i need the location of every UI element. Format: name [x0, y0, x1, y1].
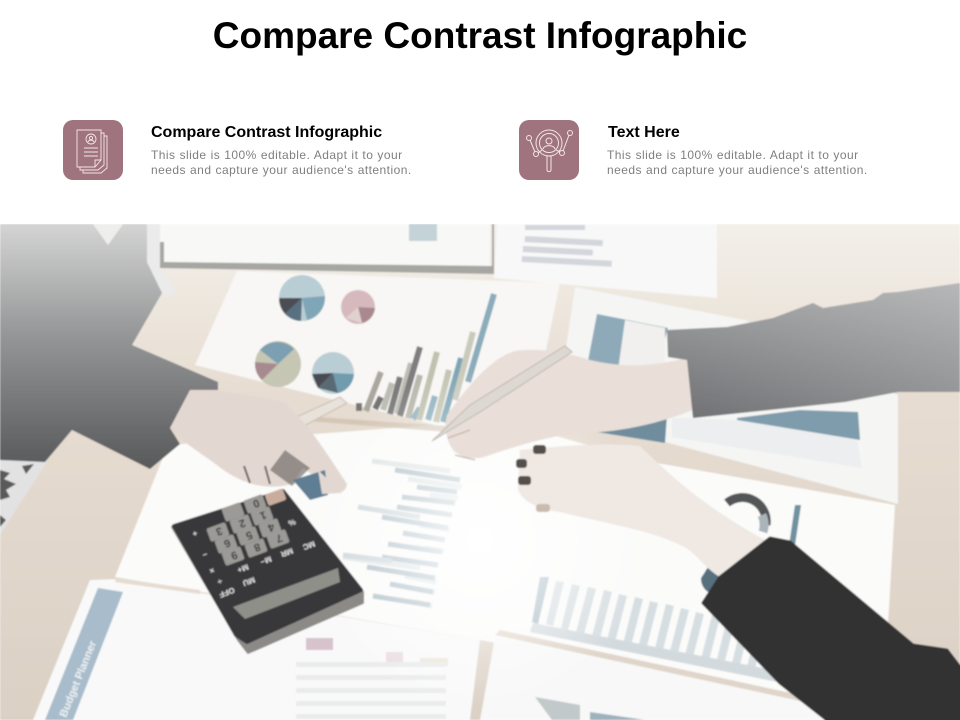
calculator: MU: [241, 575, 256, 588]
calculator: 6: [222, 536, 232, 550]
photo: business team reviewing charts: [0, 224, 960, 720]
pattern: patterned fabric: [0, 458, 48, 535]
icon: magnifier with person: [519, 120, 579, 180]
calculator: %: [287, 517, 297, 528]
calculator: 7: [274, 531, 284, 545]
shirt cuff: [93, 224, 123, 245]
text block: compare contrast: [151, 124, 412, 177]
calculator: 0: [251, 496, 261, 510]
calculator: MC: [301, 539, 316, 552]
calculator: −: [201, 549, 209, 559]
calculator: MR: [279, 546, 294, 559]
pie charts: [255, 275, 375, 394]
calculator: OFF: [218, 585, 236, 599]
bottom paper chart fragments: [58, 638, 645, 720]
icon: document stack: [63, 120, 123, 180]
text block: text here: Text Here: [608, 124, 680, 141]
chart: blue panel: [587, 314, 862, 468]
sleeve: lower right arm: [703, 538, 960, 720]
bar chart: horizontal bars: [343, 461, 462, 606]
calculator: 1: [258, 508, 268, 522]
glow: [300, 370, 660, 720]
text block: text here: [607, 124, 868, 177]
hand: lower right: [518, 444, 765, 578]
sleeve: right arm: [667, 283, 960, 418]
bar chart: bottom right stripes: [530, 505, 801, 683]
calculator: ÷: [216, 576, 223, 587]
calculator: 8: [252, 540, 262, 554]
calculator: 9: [229, 548, 239, 562]
text block: text here: This slide is 100% editable. Adapt it to your: [607, 148, 859, 162]
text block: compare contrast: Compare Contrast Infographic: [151, 124, 382, 141]
table surface: [0, 224, 960, 720]
papers: [33, 224, 898, 720]
text block: compare contrast: needs and capture your audience's attention.: [151, 163, 412, 177]
calculator: ×: [208, 565, 216, 575]
hand: left: [167, 387, 347, 492]
text block: compare contrast: This slide is 100% editable. Adapt it to your: [151, 148, 403, 162]
calculator: +: [191, 528, 199, 538]
calculator: M+: [236, 562, 250, 575]
text block: text here: needs and capture your audience's attention.: [607, 163, 868, 177]
calculator: 2: [237, 516, 247, 530]
hand: right with pen: [446, 350, 692, 458]
title: Compare Contrast Infographic: [213, 15, 747, 56]
pen left: [290, 397, 347, 428]
calculator: 4: [265, 520, 276, 534]
chart: donut: [701, 498, 766, 592]
bar chart: rising bars: [359, 294, 494, 422]
calculator: [172, 488, 363, 653]
sleeve: left arm: [0, 224, 218, 469]
calculator: M−: [259, 554, 273, 567]
bottom paper chart fragments: Budget Planner: [58, 639, 100, 719]
calculator: 5: [244, 528, 254, 542]
calculator: 3: [214, 524, 224, 538]
